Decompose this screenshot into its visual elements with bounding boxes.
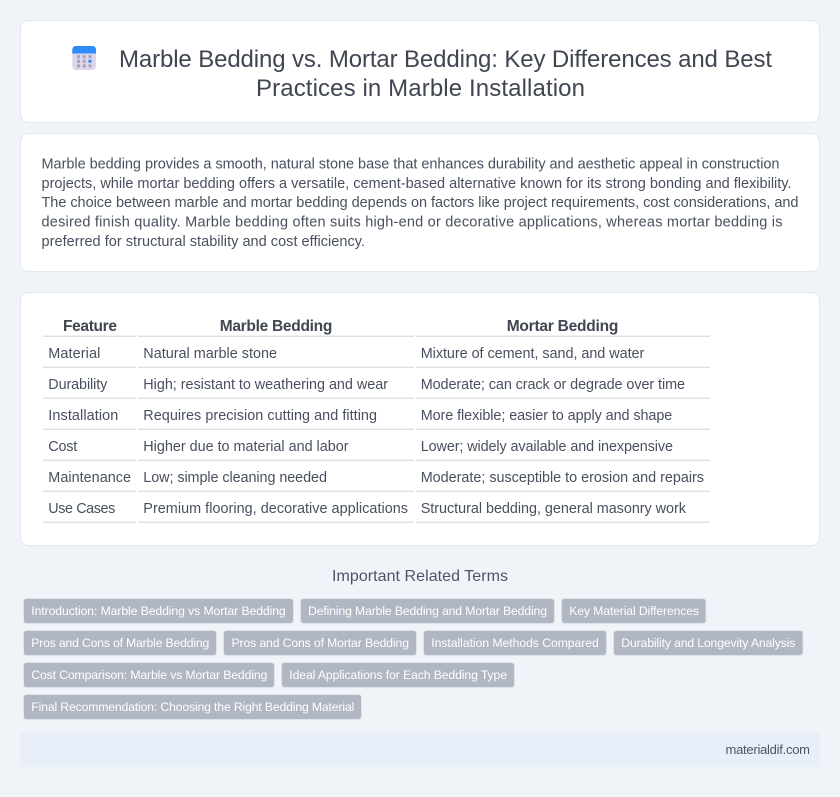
row: maintenance: Maintenance xyxy=(48,470,131,486)
panel: introduction text xyxy=(20,134,820,272)
related term tags xyxy=(24,598,803,720)
row: installation: Installation xyxy=(48,408,118,424)
tag: Ideal Applications for Each Bedding Type xyxy=(289,668,507,682)
tag: Final Recommendation: Choosing the Right Bedding Material xyxy=(31,700,354,714)
tag: Pros and Cons of Marble Bedding xyxy=(31,636,209,650)
tag xyxy=(24,694,362,720)
intro paragraph: projects, while mortar bedding offers a versatile, cement-based alternative known for its strong bonding and flexibility. xyxy=(42,176,792,192)
row: installation: More flexible; easier to apply and shape xyxy=(421,408,672,424)
row: material: Material xyxy=(48,346,100,362)
intro paragraph xyxy=(42,156,798,250)
row: installation: Requires precision cutting and fitting xyxy=(143,408,377,424)
header panel xyxy=(20,20,820,122)
row: cost: Cost xyxy=(48,439,77,455)
intro paragraph: preferred for structural stability and cost efficiency. xyxy=(42,234,365,250)
row: use cases: Use Cases xyxy=(48,501,115,517)
footer xyxy=(20,733,820,767)
tag: Introduction: Marble Bedding vs Mortar Bedding xyxy=(31,604,286,618)
tag: Pros and Cons of Mortar Bedding xyxy=(232,636,409,650)
heading: important related terms: Important Related Terms xyxy=(332,568,508,585)
tag xyxy=(300,598,554,624)
intro paragraph: Marble bedding provides a smooth, natural stone base that enhances durability and aesthetic appeal in construction xyxy=(42,156,780,172)
row: durability xyxy=(48,377,685,393)
row: installation xyxy=(48,408,672,424)
row: durability: Durability xyxy=(48,377,108,393)
row: durability: High; resistant to weathering and wear xyxy=(143,377,388,393)
tag xyxy=(562,598,706,624)
intro paragraph: The choice between marble and mortar bedding depends on factors like project requirements, cost considerations, and xyxy=(42,195,798,211)
tag xyxy=(614,630,803,656)
tag: Cost Comparison: Marble vs Mortar Bedding xyxy=(31,668,267,682)
row: maintenance xyxy=(48,470,704,486)
table header: Mortar Bedding xyxy=(507,318,618,335)
icon: calendar xyxy=(72,46,96,70)
footer source text: materialdif.com xyxy=(726,742,810,757)
row: cost: Higher due to material and labor xyxy=(143,439,349,455)
row: use cases xyxy=(48,501,687,517)
tag: Key Material Differences xyxy=(569,604,699,618)
intro paragraph: desired finish quality. Marble bedding often suits high-end or decorative applications, whereas mortar bedding is xyxy=(42,215,782,231)
row: durability: Moderate; can crack or degrade over time xyxy=(421,377,685,393)
tag xyxy=(424,630,606,656)
row: use cases: Premium flooring, decorative applications xyxy=(143,501,408,517)
table header: Marble Bedding xyxy=(220,318,332,335)
tag xyxy=(24,662,274,688)
row: cost xyxy=(48,439,673,455)
title: Practices in Marble Installation xyxy=(256,75,585,102)
table header xyxy=(63,318,618,335)
table header: Feature xyxy=(63,318,117,335)
tag xyxy=(24,598,294,624)
tag xyxy=(24,630,216,656)
tag: Defining Marble Bedding and Mortar Bedding xyxy=(308,604,547,618)
row: cost: Lower; widely available and inexpensive xyxy=(421,439,673,455)
row: material: Mixture of cement, sand, and water xyxy=(421,346,645,362)
row: maintenance: Low; simple cleaning needed xyxy=(143,470,327,486)
tag: Installation Methods Compared xyxy=(431,636,599,650)
tag xyxy=(282,662,514,688)
title: Marble Bedding vs. Mortar Bedding: Key Differences and Best xyxy=(119,46,772,73)
title xyxy=(119,46,772,102)
row: material xyxy=(48,346,645,362)
panel: comparison table xyxy=(20,292,820,546)
tag: Durability and Longevity Analysis xyxy=(621,636,795,650)
row: material: Natural marble stone xyxy=(143,346,277,362)
row: maintenance: Moderate; susceptible to erosion and repairs xyxy=(421,470,704,486)
tag xyxy=(224,630,416,656)
row: use cases: Structural bedding, general masonry work xyxy=(421,501,687,517)
